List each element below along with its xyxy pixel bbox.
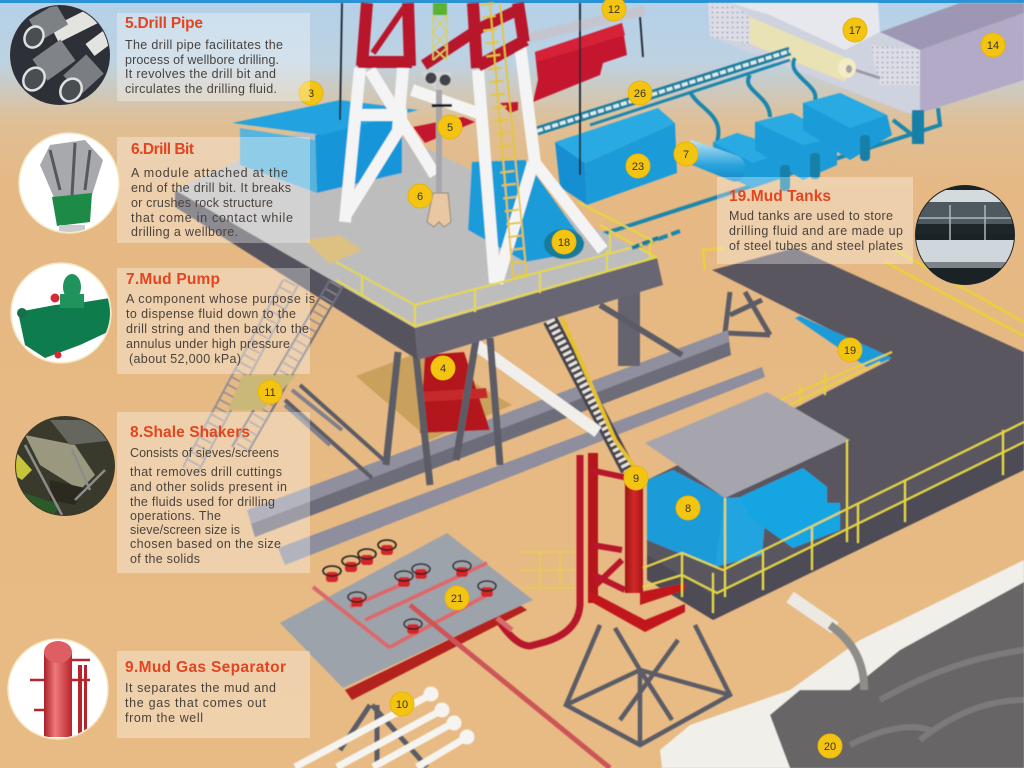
number badges: 6 (417, 191, 423, 203)
conveyor rail 26 (537, 51, 790, 131)
panel: 6 Drill Bit: 6.Drill Bit (131, 141, 194, 158)
photo: mud gas separator (8, 639, 108, 739)
panel: 6 Drill Bit (117, 137, 310, 243)
number badges: 11 (264, 387, 276, 399)
roof over shale shakers (645, 392, 850, 498)
panel: 9 Mud Gas Separator: the gas that comes out (125, 696, 267, 710)
panel: 5 Drill Pipe: process of wellbore drilling. (125, 53, 279, 67)
panel: 19 Mud Tanks: Mud tanks are used to store (729, 209, 893, 223)
number badges: 21 (451, 593, 463, 605)
panel: 19 Mud Tanks: of steel tubes and steel plates (729, 239, 903, 253)
mud pit 20 (660, 560, 1024, 768)
yellow upper rails (703, 248, 1024, 336)
number badges: 26 (634, 88, 646, 100)
storage building 14 (708, 3, 1024, 113)
panel: 7 Mud Pump: 7.Mud Pump (126, 271, 220, 288)
panel: 7 Mud Pump: A component whose purpose is (126, 292, 315, 306)
valves (326, 545, 493, 634)
red tower 9 (497, 453, 685, 646)
number badges: 20 (824, 741, 836, 753)
red drawworks base (413, 102, 518, 143)
choke manifold 21 (280, 533, 610, 768)
panel: 9 Mud Gas Separator: from the well (125, 711, 203, 725)
panel: 7 Mud Pump: to dispense fluid down to the (126, 307, 296, 321)
number badges: 3 (308, 88, 314, 100)
panel: 6 Drill Bit: A module attached at the (131, 166, 288, 180)
panel: 8 Shale Shakers (117, 412, 310, 573)
panel: 19 Mud Tanks: 19.Mud Tanks (729, 188, 831, 205)
panel: 8 Shale Shakers: 8.Shale Shakers (130, 424, 250, 441)
panel: 7 Mud Pump: annulus under high pressure (126, 337, 290, 351)
number badges: 23 (632, 161, 644, 173)
number badges: 17 (849, 25, 861, 37)
blue box 18 (468, 160, 585, 262)
panel: 5 Drill Pipe: The drill pipe facilitates the (125, 38, 283, 52)
yellow railing around shaker platform (520, 422, 1024, 613)
panel: 8 Shale Shakers: the fluids used for drilling (130, 495, 275, 509)
derrick tower white legs (345, 45, 603, 283)
panel: 5 Drill Pipe: 5.Drill Pipe (125, 15, 203, 32)
long gray beams (247, 330, 765, 565)
panel: 6 Drill Bit: end of the drill bit. It breaks (131, 181, 291, 195)
photo: shale shakers (14, 416, 115, 520)
panel: 5 Drill Pipe: It revolves the drill bit and (125, 67, 276, 81)
cylinder 7 (685, 140, 745, 182)
discharge pipe (790, 597, 835, 628)
deck legs (285, 288, 682, 485)
panel: 7 Mud Pump: (about 52,000 kPa) (129, 352, 241, 366)
number badges: 7 (683, 149, 689, 161)
number badges: 14 (987, 40, 999, 52)
shale shaker tanks 8 (647, 468, 840, 567)
panel: 9 Mud Gas Separator: 9.Mud Gas Separator (125, 659, 286, 676)
panel: 8 Shale Shakers: chosen based on the size (130, 537, 281, 551)
number badges (258, 0, 1005, 758)
panel: 6 Drill Bit: or crushes rock structure (131, 196, 273, 210)
number badges: 9 (633, 473, 639, 485)
deck back ladder and yellow pipe (476, 318, 640, 475)
top blue bar (0, 0, 1024, 3)
panel: 19 Mud Tanks (717, 177, 913, 264)
white pipes 10 (295, 686, 474, 768)
number badges: 12 (608, 4, 620, 16)
panel: 7 Mud Pump: drill string and then back to the (126, 322, 309, 336)
blue box 3 (232, 100, 418, 193)
gray beam and red unit 12 (527, 5, 645, 102)
panel: 6 Drill Bit: that come in contact while (131, 211, 293, 225)
blue mud tanks (685, 93, 924, 191)
panel: 5 Drill Pipe: circulates the drilling fluid. (125, 82, 277, 96)
drill string and bit (420, 3, 452, 227)
number badges: 10 (396, 699, 408, 711)
panel: 8 Shale Shakers: that removes drill cuttings (130, 465, 282, 479)
panel: 8 Shale Shakers: and other solids present in (130, 480, 287, 494)
gray truss under tower (566, 625, 730, 745)
photo: mud tanks (915, 185, 1015, 285)
panel: 7 Mud Pump (117, 268, 315, 374)
number badges: 5 (447, 122, 453, 134)
panel: 6 Drill Bit: drilling a wellbore. (131, 225, 238, 239)
access stairs 11 (183, 280, 343, 472)
photo: drill pipe (10, 5, 110, 106)
ground shadow and red cone 4 (356, 352, 512, 440)
blue channel 19 (795, 316, 892, 368)
blue box 23 (555, 108, 677, 205)
panel: 8 Shale Shakers: of the solids (130, 552, 200, 566)
number badges: 18 (558, 237, 570, 249)
panel: 19 Mud Tanks: drilling fluid and are made up (729, 224, 903, 238)
derrick red top (358, 3, 526, 68)
stair landing (305, 235, 362, 264)
mud tank pipes (600, 58, 940, 249)
manifold pipes (313, 563, 610, 768)
panel: 8 Shale Shakers: operations. The (130, 509, 221, 523)
photo: mud pump (11, 263, 112, 363)
photo: drill bit (19, 133, 119, 235)
panel: 5 Drill Pipe (117, 13, 310, 101)
panel: 9 Mud Gas Separator (117, 651, 310, 738)
number badges: 4 (440, 363, 446, 375)
rig deck (175, 110, 663, 360)
yellow derrick ladder (487, 3, 527, 278)
panel: 9 Mud Gas Separator: It separates the mud and (125, 681, 276, 695)
number badges: 19 (844, 345, 856, 357)
number badges: 8 (685, 503, 691, 515)
panel: 8 Shale Shakers: sieve/screen size is (130, 523, 240, 537)
deck railing (336, 202, 658, 327)
tank platform right (647, 248, 1024, 620)
panel: 8 Shale Shakers: Consists of sieves/screens (130, 446, 279, 460)
cables (340, 3, 643, 175)
